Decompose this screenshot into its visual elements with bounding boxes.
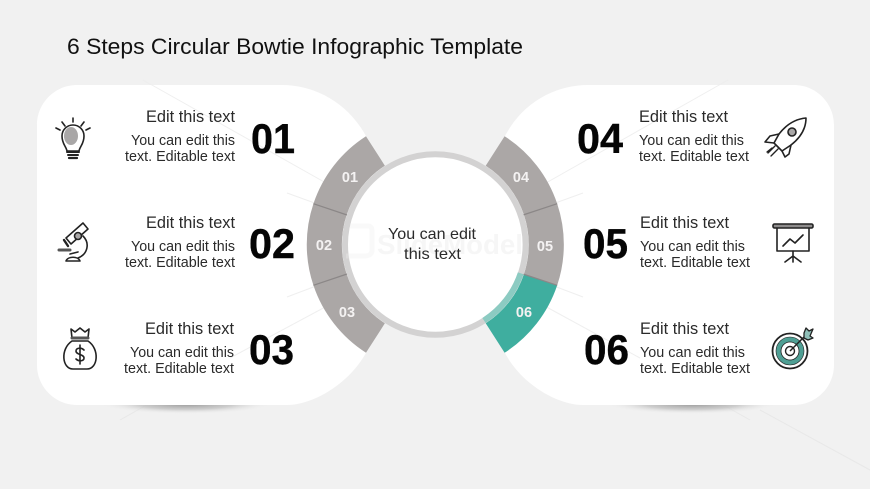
step 04 text: 04 <box>577 115 624 162</box>
step 03 text: 03 <box>249 326 294 373</box>
step 03 text <box>124 320 294 377</box>
center text: You can edit <box>388 226 477 243</box>
step 04 text: text. Editable text <box>639 148 750 165</box>
icon: target with dart <box>772 328 813 368</box>
panel shadows <box>100 394 778 414</box>
step 02 text: You can edit this <box>131 238 235 255</box>
step 06 text: 06 <box>584 326 629 373</box>
icon: light bulb <box>56 118 90 158</box>
segment labels: 01 <box>342 170 358 186</box>
step 01 text <box>125 108 295 165</box>
step 01 text: 01 <box>251 115 295 162</box>
panel: right white card <box>486 85 834 405</box>
segment labels: 02 <box>316 238 332 254</box>
center text <box>388 226 477 263</box>
step 05 text: You can edit this <box>640 238 745 255</box>
step 06 text: Edit this text <box>640 320 729 338</box>
step 05 text: 05 <box>583 220 628 267</box>
step 01 text: You can edit this <box>131 132 235 149</box>
step 02 text: Edit this text <box>146 214 235 232</box>
icon: presentation board <box>773 224 813 262</box>
step 01 text: text. Editable text <box>125 148 236 165</box>
step 02 text: 02 <box>249 220 295 267</box>
step 02 text: text. Editable text <box>125 254 236 271</box>
segment labels: 05 <box>537 239 553 255</box>
step 05 text <box>583 214 751 271</box>
step 04 text: You can edit this <box>639 132 744 149</box>
step 05 text: text. Editable text <box>640 254 751 271</box>
segment labels: 03 <box>339 305 355 321</box>
step 03 text: text. Editable text <box>124 360 235 377</box>
step 03 text: Edit this text <box>145 320 234 338</box>
icon: rocket <box>765 118 806 157</box>
segment 01 <box>313 136 385 215</box>
inner ring <box>345 154 526 335</box>
icon: microscope <box>59 223 88 261</box>
step 04 text: Edit this text <box>639 108 728 126</box>
step 06 text: You can edit this <box>640 344 745 361</box>
icon: money bag <box>64 328 96 369</box>
segment 05 <box>524 204 564 285</box>
segment labels <box>316 170 553 321</box>
segment 02 <box>307 204 347 285</box>
segment 04 <box>486 136 557 215</box>
step 04 text <box>577 108 750 165</box>
step 01 text: Edit this text <box>146 108 235 126</box>
segment labels: 04 <box>513 170 529 186</box>
panel: left white card <box>37 85 385 405</box>
step 05 text: Edit this text <box>640 214 729 232</box>
segment labels: 06 <box>516 305 532 321</box>
segment 06 <box>486 274 557 353</box>
center text: this text <box>404 246 462 263</box>
step 06 text: text. Editable text <box>640 360 751 377</box>
step 03 text: You can edit this <box>130 344 234 361</box>
watermark: SlideModel <box>377 229 523 260</box>
circular bowtie ring <box>307 136 564 353</box>
step 02 text <box>125 214 295 271</box>
title: 6 Steps Circular Bowtie Infographic Template <box>67 34 523 59</box>
step 06 text <box>584 320 751 377</box>
segment 03 <box>313 274 385 353</box>
